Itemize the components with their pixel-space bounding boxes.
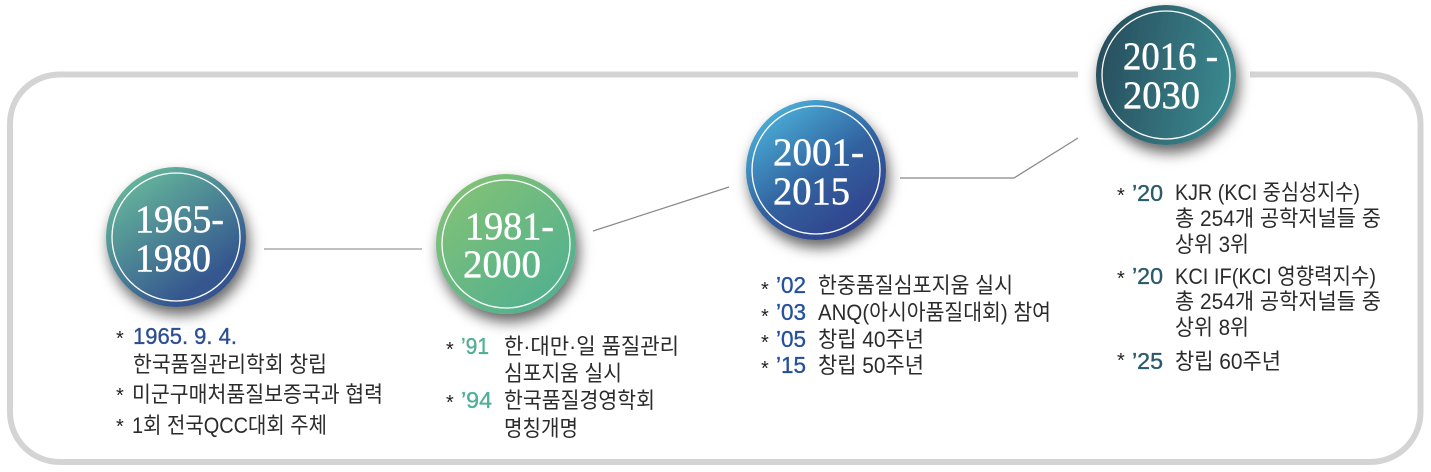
events list: *: [446, 339, 454, 361]
events list: 상위 3위: [1175, 232, 1249, 257]
events list: ’25: [1132, 348, 1163, 374]
badge: 1965-1980: 1980: [135, 237, 211, 280]
events list: 창립 40주년: [818, 327, 924, 352]
badge: 1981-2000: [436, 174, 576, 314]
events list: 1965. 9. 4.: [133, 323, 237, 349]
events list: ’91: [461, 333, 489, 359]
events list: ’15: [776, 352, 806, 378]
events list: 총 254개 공학저널들 중: [1175, 289, 1381, 314]
badge: 2001-2015: 2001-: [773, 131, 864, 174]
events list: *: [1117, 185, 1125, 207]
events list: 미군구매처품질보증국과 협력: [132, 382, 383, 407]
badge: 2016-2030: 2016 -: [1123, 35, 1218, 78]
events list: ’20: [1132, 263, 1163, 289]
events list: ’05: [776, 326, 806, 352]
events list: [1117, 180, 1381, 374]
events list: 상위 8위: [1175, 315, 1249, 340]
events list: KJR (KCI 중심성지수): [1175, 180, 1360, 205]
events list: *: [761, 332, 769, 354]
events list: *: [761, 306, 769, 328]
events list: 심포지움 실시: [504, 361, 622, 386]
events list: *: [1117, 268, 1125, 290]
badge: 1981-2000: 1981-: [465, 205, 554, 248]
badge: 1965-1980: [106, 167, 246, 307]
connector: 1965-1980 to 1981-2000: [264, 248, 422, 250]
connector: 1981-2000 to 2001-2015: [593, 187, 729, 231]
events list: 창립 50주년: [818, 353, 924, 378]
badge: 2001-2015: [746, 100, 886, 240]
events list: [116, 323, 383, 438]
connector: 2001-2015 to 2016-2030: [900, 138, 1078, 178]
events list: *: [1117, 350, 1125, 372]
events list: ANQ(아시아품질대회) 참여: [818, 300, 1051, 325]
events list: [761, 272, 1051, 380]
events list: ’94: [461, 387, 492, 413]
badge: 2016-2030: [1096, 5, 1236, 145]
events list: ’03: [776, 299, 806, 325]
events list: 창립 60주년: [1175, 349, 1281, 374]
events list: *: [116, 328, 124, 350]
events list: *: [116, 416, 124, 438]
events list: 한중품질심포지움 실시: [818, 273, 1013, 298]
events list: KCI IF(KCI 영향력지수): [1175, 264, 1376, 289]
badge: 2001-2015: 2015: [773, 170, 850, 213]
badge: 1965-1980: 1965-: [135, 198, 224, 241]
events list: ’20: [1132, 180, 1163, 206]
events list: 한·대만·일 품질관리: [504, 334, 679, 359]
period 1981-2000: [436, 174, 679, 441]
events list: 한국품질경영학회: [504, 388, 655, 413]
events list: *: [761, 358, 769, 380]
badge: 1981-2000: 2000: [463, 243, 541, 286]
events list: 한국품질관리학회 창립: [133, 352, 327, 377]
events list: *: [116, 385, 124, 407]
events list: *: [761, 279, 769, 301]
events list: 1회 전국QCC대회 주체: [132, 413, 327, 438]
events list: 총 254개 공학저널들 중: [1175, 206, 1381, 231]
period 1965-1980: [106, 167, 383, 438]
events list: [446, 333, 679, 441]
events list: *: [446, 392, 454, 414]
badge: 2016-2030: 2030: [1123, 74, 1200, 117]
period 2001-2015: [746, 100, 1051, 380]
events list: ’02: [776, 272, 806, 298]
events list: 명칭개명: [504, 416, 578, 441]
period 2016-2030: [1096, 5, 1381, 374]
